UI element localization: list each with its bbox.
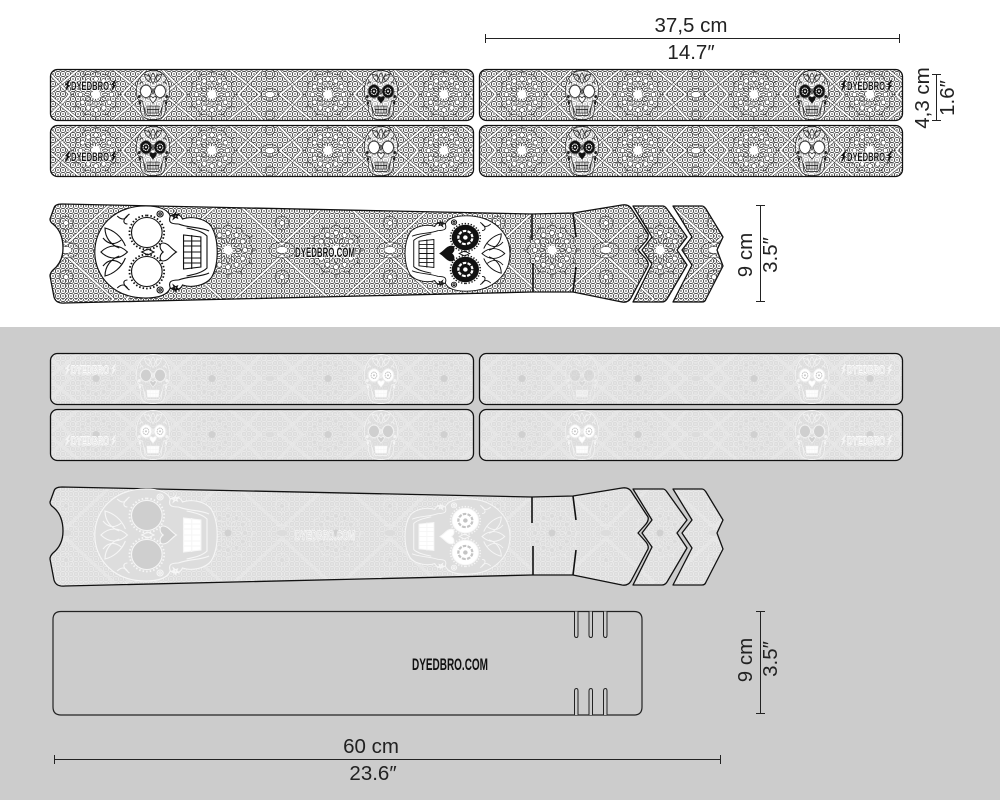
skull: dark eyes xyxy=(136,126,170,176)
logo: DYEDBRO: DYEDBRO xyxy=(847,150,885,164)
dimension: strip length 37,5 cm / 14.7 in: 37,5 cm xyxy=(655,14,727,37)
skull: pale detailed xyxy=(565,410,599,460)
logo: DYEDBRO: DYEDBRO xyxy=(71,150,109,164)
clear strip: bottom right xyxy=(480,410,902,460)
logo: DYEDBRO.COM: DYEDBRO.COM xyxy=(412,655,488,674)
dimension: guard width 9 cm / 3.5 in xyxy=(734,205,782,302)
dimension: strip width 4,3 cm / 1.6 in xyxy=(911,67,959,129)
dimension: blank width 9 cm / 3.5 in: 3.5″ xyxy=(759,641,782,677)
skull: pale xyxy=(364,410,398,460)
slots: top xyxy=(574,612,607,638)
skull: large pale, facing left xyxy=(405,499,510,574)
white upper section background xyxy=(0,0,1000,327)
skull: large dark, facing left xyxy=(405,216,510,291)
skull: light eyes xyxy=(136,70,170,120)
printed strip: top left xyxy=(50,70,474,120)
printed down-tube guard xyxy=(50,204,723,303)
logo: DYEDBRO: DYEDBRO xyxy=(71,79,109,93)
skull: pale detailed xyxy=(795,354,829,404)
dimension: strip length 37,5 cm / 14.7 in: 14.7″ xyxy=(667,41,715,64)
slots: bottom xyxy=(574,688,607,715)
logo: DYEDBRO xyxy=(65,79,116,93)
logo: DYEDBRO: DYEDBRO xyxy=(71,363,109,377)
logo: DYEDBRO: DYEDBRO xyxy=(847,79,885,93)
skull: large light, facing right xyxy=(95,206,217,298)
dimension: blank width 9 cm / 3.5 in: 9 cm xyxy=(734,638,757,682)
logo: DYEDBRO xyxy=(841,79,892,93)
printed strip: bottom right xyxy=(480,126,902,176)
dimension: strip width 4,3 cm / 1.6 in: 1.6″ xyxy=(936,80,959,116)
logo: DYEDBRO xyxy=(841,434,892,448)
clear strip: top right xyxy=(480,354,902,404)
skull: light eyes xyxy=(795,126,829,176)
logo: DYEDBRO.COM: DYEDBRO.COM xyxy=(295,527,355,543)
skull: large pale, facing right xyxy=(95,489,217,581)
dimension: blank length 60 cm / 23.6 in xyxy=(54,735,720,785)
logo: DYEDBRO: DYEDBRO xyxy=(71,434,109,448)
skull: pale xyxy=(136,354,170,404)
skull: pale detailed xyxy=(136,410,170,460)
logo: DYEDBRO.COM: DYEDBRO.COM xyxy=(295,244,355,260)
dimension: strip width 4,3 cm / 1.6 in: 4,3 cm xyxy=(911,67,934,129)
logo: DYEDBRO: DYEDBRO xyxy=(847,434,885,448)
skull: pale detailed xyxy=(364,354,398,404)
skull: dark eyes xyxy=(364,70,398,120)
dimension: blank width 9 cm / 3.5 in xyxy=(734,611,782,714)
printed strip: bottom left xyxy=(50,126,474,176)
dimension: guard width 9 cm / 3.5 in: 3.5″ xyxy=(759,237,782,273)
dimension: blank length 60 cm / 23.6 in: 23.6″ xyxy=(349,762,397,785)
blank chainstay protector xyxy=(53,612,642,715)
clear strip: bottom left xyxy=(50,410,474,460)
printed strip: top right xyxy=(480,70,902,120)
clear down-tube guard xyxy=(50,487,723,586)
skull: light eyes xyxy=(364,126,398,176)
skull: light eyes xyxy=(565,70,599,120)
logo: DYEDBRO xyxy=(65,363,116,377)
dimension: strip length 37,5 cm / 14.7 in xyxy=(486,14,900,64)
logo: DYEDBRO xyxy=(65,150,116,164)
grey lower section background xyxy=(0,327,1000,800)
skull: faint xyxy=(565,354,599,404)
cut lines xyxy=(532,496,576,575)
logo: DYEDBRO xyxy=(841,363,892,377)
cut lines xyxy=(532,213,576,292)
dimension: blank length 60 cm / 23.6 in: 60 cm xyxy=(343,735,399,758)
dimension: guard width 9 cm / 3.5 in: 9 cm xyxy=(734,233,757,277)
clear strip: top left xyxy=(50,354,474,404)
skull: dark eyes xyxy=(795,70,829,120)
logo: DYEDBRO xyxy=(65,434,116,448)
skull: pale xyxy=(795,410,829,460)
skull: dark eyes xyxy=(565,126,599,176)
logo: DYEDBRO: DYEDBRO xyxy=(847,363,885,377)
logo: DYEDBRO xyxy=(841,150,892,164)
